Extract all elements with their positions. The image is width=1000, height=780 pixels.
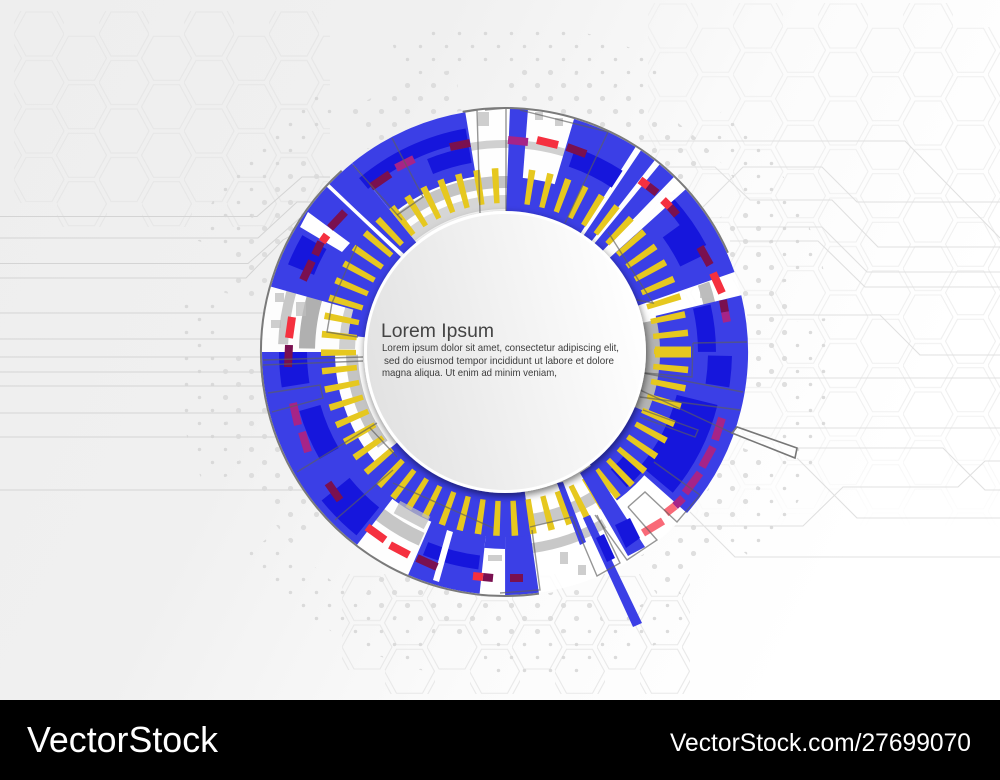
- footer logo text: VectorStock: [27, 719, 219, 760]
- body text: sed do eiusmod tempor incididunt ut labore et dolore: [384, 356, 614, 367]
- ring base: [314, 161, 696, 543]
- circuit lines: right: [640, 141, 1000, 557]
- halftone dot field around the ring: [197, 44, 813, 660]
- hexagon grid: bottom: [342, 574, 692, 696]
- outer rim arcs: [222, 69, 788, 635]
- white wedge and separators: [300, 184, 453, 582]
- wide yellow tick: [655, 346, 691, 358]
- darker blue overlays: [191, 38, 819, 666]
- circuit lines: left: [0, 177, 330, 490]
- grey technical outlines: [263, 108, 747, 593]
- body text: magna aliqua. Ut enim ad minim veniam,: [382, 368, 557, 379]
- heading: Lorem Ipsum: [381, 321, 494, 342]
- protruding blue strips: [506, 107, 645, 627]
- yellow tick marks: [334, 181, 676, 523]
- hexagon grid: right: [648, 3, 1000, 460]
- body text: [382, 343, 619, 379]
- blue sectors: [209, 56, 801, 648]
- footer bar: [0, 700, 1000, 780]
- grey pixel blocks: [271, 112, 710, 575]
- dark strip tips: [596, 518, 640, 562]
- radial dial: [191, 38, 819, 666]
- grey bands in white sectors: [234, 81, 776, 623]
- body text: Lorem ipsum dolor sit amet, consectetur adipiscing elit,: [382, 343, 619, 354]
- hexagon grid: top left: [14, 10, 330, 230]
- footer image id: VectorStock.com/27699070: [670, 729, 971, 757]
- protruding outline bar: [732, 427, 797, 458]
- center disc: [364, 211, 646, 493]
- red dashed ring segments: [288, 140, 727, 578]
